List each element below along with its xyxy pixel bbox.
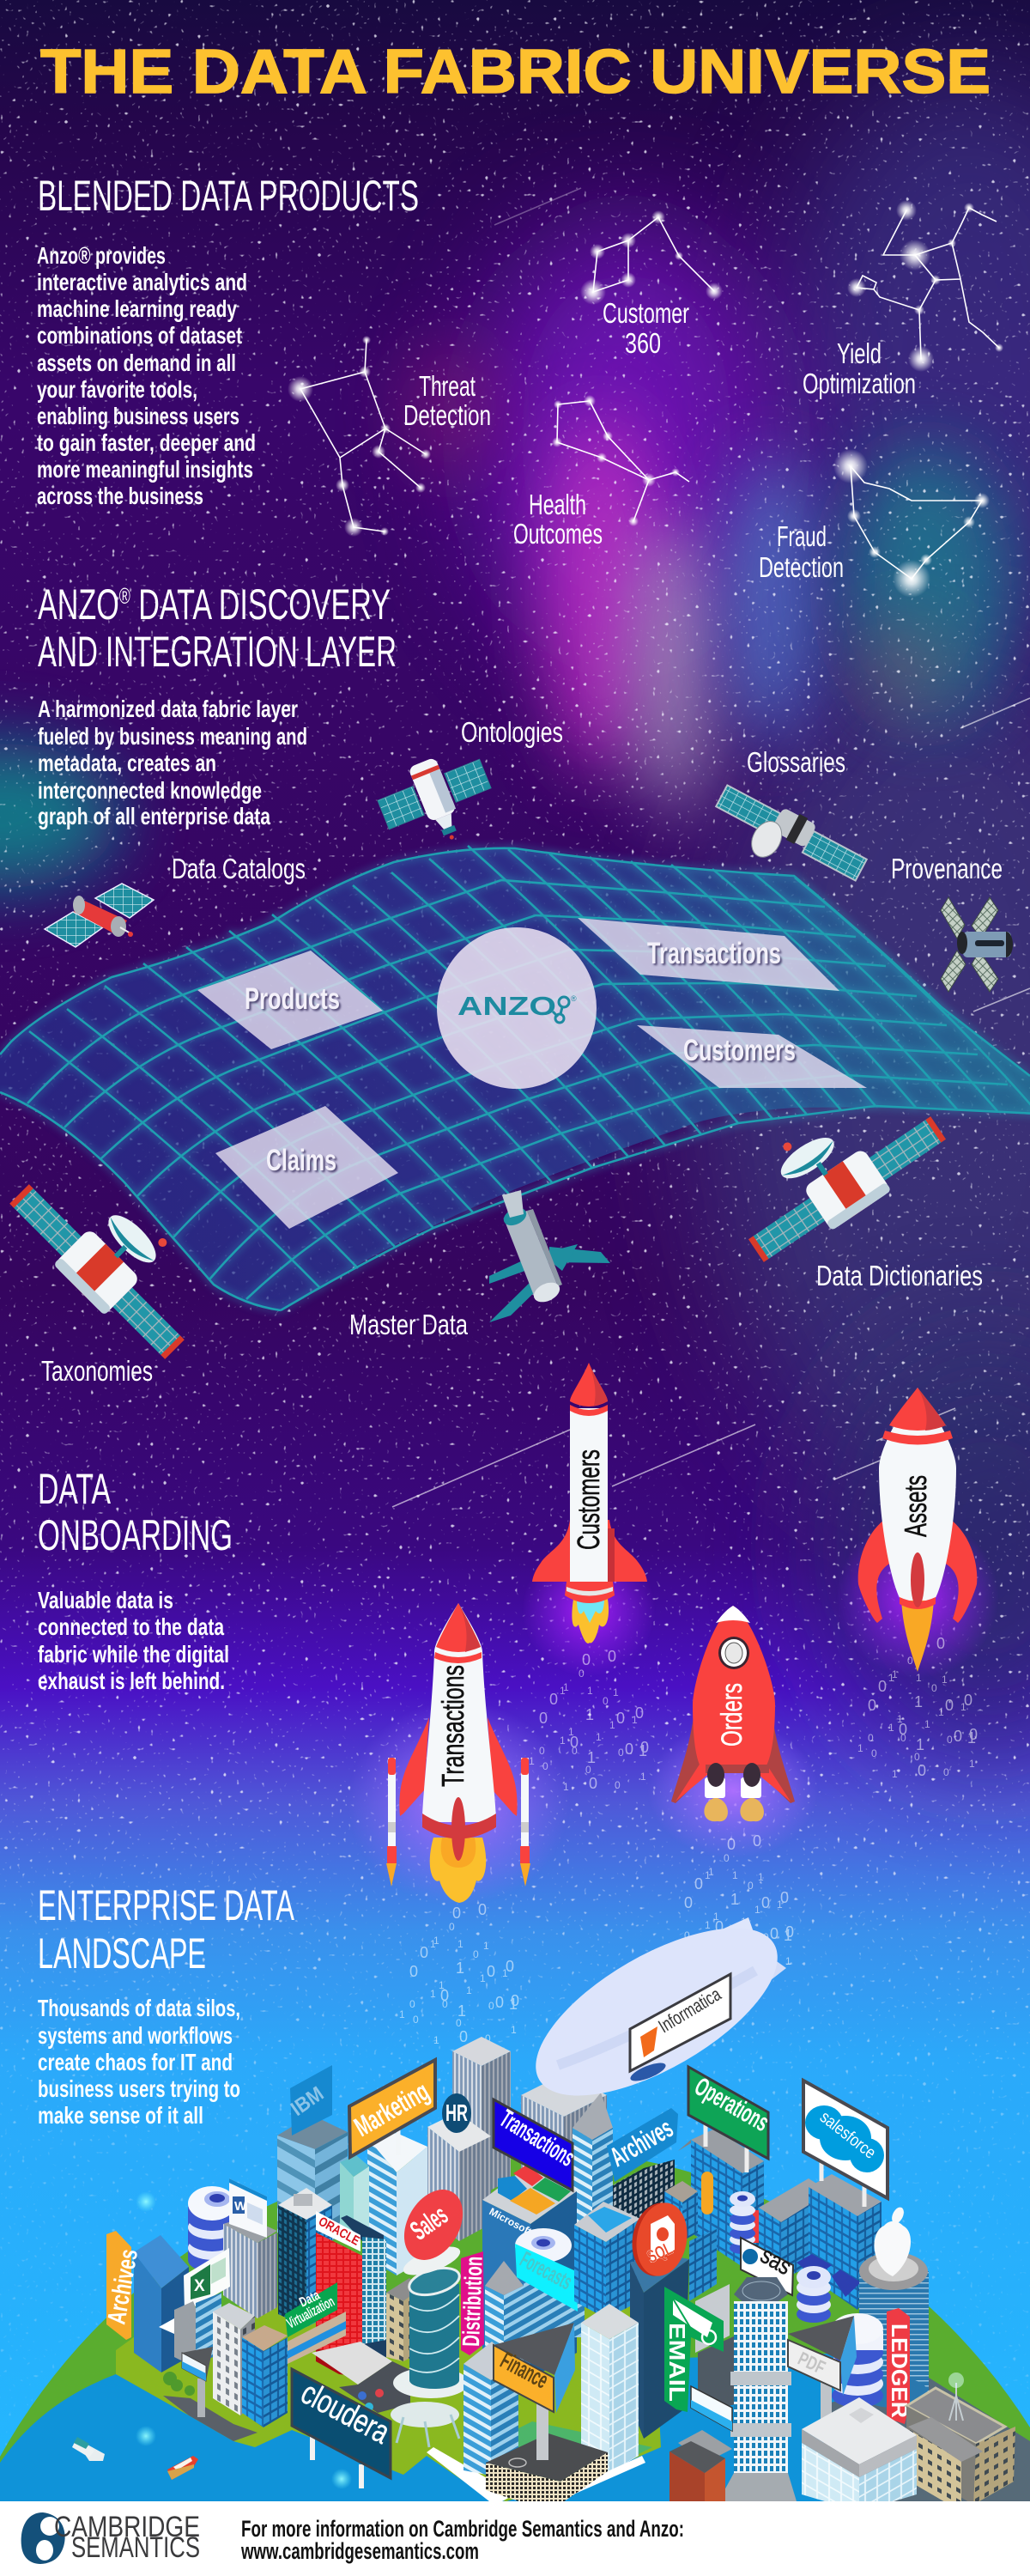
sign: sql: SQL bbox=[644, 2239, 676, 2268]
text block: integration layer: fueled by business meaning and bbox=[38, 723, 307, 750]
tower: dark glass bbox=[278, 2188, 332, 2327]
rocket label: customers: Customers bbox=[571, 1449, 606, 1550]
label: data dictionaries: Data Dictionaries bbox=[816, 1260, 983, 1291]
building: brick bbox=[670, 2430, 732, 2512]
label: data catalogs: Data Catalogs bbox=[172, 853, 306, 884]
rocket: assets bbox=[858, 1388, 977, 1672]
binary exhaust: customers: 10111011010110001110 bbox=[529, 1668, 646, 1793]
blocks: behind salesforce bbox=[759, 2174, 882, 2310]
building: pale bbox=[367, 2133, 427, 2275]
label: master data: Master Data bbox=[349, 1309, 468, 1340]
rocket: transactions bbox=[386, 1603, 530, 1903]
tower: blue peak bbox=[573, 2093, 613, 2233]
sign: sales: Sales bbox=[404, 2199, 453, 2246]
billboard: cloudera: cloudera bbox=[295, 2375, 396, 2451]
constellation: health outcomes bbox=[513, 395, 689, 550]
constellation: threat detection: Threat bbox=[419, 370, 476, 402]
binary exhaust: transactions: 0000100010100 bbox=[409, 1901, 519, 2045]
text block: enterprise data landscape: create chaos for IT and bbox=[38, 2049, 233, 2075]
label: glossaries: Glossaries bbox=[747, 746, 845, 778]
airship: informatica: Informatica bbox=[655, 1983, 725, 2037]
rocket label: orders: Orders bbox=[716, 1683, 748, 1747]
rocket glows bbox=[347, 1516, 999, 1906]
binary exhaust: assets: 0000100010100 bbox=[868, 1635, 978, 1779]
heading: enterprise data landscape: LANDSCAPE bbox=[38, 1929, 206, 1978]
binary exhaust: customers: 0000100010100 bbox=[539, 1648, 649, 1792]
constellation: fraud detection: Fraud bbox=[777, 520, 827, 552]
constellation: yield optimization: Optimization bbox=[803, 368, 916, 399]
building: microsoft: Microsoft bbox=[488, 2205, 534, 2238]
text block: data onboarding: exhaust is left behind. bbox=[38, 1668, 225, 1694]
heading: data onboarding: ONBOARDING bbox=[38, 1511, 233, 1559]
tower: teal right of oracle bbox=[341, 2215, 386, 2363]
panel: customers: Customers bbox=[683, 1034, 796, 1067]
text block: blended data products bbox=[37, 242, 256, 509]
label: taxonomies: Taxonomies bbox=[41, 1355, 153, 1387]
database: forecasts bbox=[515, 2228, 572, 2263]
constellation: health outcomes: Outcomes bbox=[513, 518, 603, 550]
skybridge bbox=[288, 2312, 346, 2364]
satellite: data dictionaries bbox=[715, 1067, 953, 1272]
heading: anzo data discovery and integration layer: ® bbox=[119, 583, 130, 609]
data fabric mesh bbox=[0, 846, 1030, 1310]
billboard: salesforce bbox=[803, 2081, 888, 2207]
sign: data virtualization bbox=[284, 2282, 337, 2337]
sign: forecasts: Forecasts bbox=[516, 2246, 577, 2294]
sign: sas: sas bbox=[756, 2241, 797, 2280]
constellation: yield optimization: Yield bbox=[837, 337, 882, 369]
building: brown front bbox=[486, 2433, 608, 2512]
tower: ibm bbox=[277, 2120, 348, 2241]
building: small right of dark tower bbox=[689, 2228, 736, 2413]
isometric city bbox=[72, 2037, 1015, 2512]
tower: round glass bbox=[391, 2241, 469, 2447]
text block: data onboarding: connected to the data bbox=[38, 1613, 224, 1640]
text block: integration layer: interconnected knowledge bbox=[38, 777, 262, 804]
text block: integration layer bbox=[38, 696, 307, 829]
sign: excel: X bbox=[194, 2277, 205, 2295]
constellation: threat detection bbox=[288, 336, 491, 537]
satellite: ontologies bbox=[371, 742, 504, 860]
tower: striped front bbox=[464, 2342, 518, 2476]
footer bbox=[0, 2501, 1030, 2576]
sign: ledger: LEDGER bbox=[887, 2324, 912, 2418]
heading: anzo data discovery and integration layer: ANZO bbox=[38, 580, 157, 629]
billboard: cloudera bbox=[292, 2369, 396, 2488]
constellation: fraud detection: Detection bbox=[759, 551, 844, 583]
text block: blended data products: your favorite tools, bbox=[37, 376, 197, 403]
text block: integration layer: graph of all enterprise data bbox=[38, 803, 270, 829]
tower: striped spire rear bbox=[485, 2261, 524, 2379]
tower: dark tall bbox=[630, 2254, 689, 2439]
text block: integration layer: A harmonized data fabric layer bbox=[38, 696, 298, 722]
building: apple cylinder bbox=[859, 2205, 929, 2408]
building: microsoft bbox=[482, 2164, 577, 2379]
text block: blended data products: across the business bbox=[37, 483, 203, 509]
constellation: fraud detection bbox=[759, 449, 990, 598]
heading: anzo data discovery and integration layer: DATA DISCOVERY bbox=[130, 580, 391, 629]
billboard: marketing bbox=[348, 2060, 435, 2157]
billboard: transactions bbox=[494, 2099, 579, 2190]
text block: data onboarding: fabric while the digital bbox=[38, 1641, 229, 1668]
tower: hr bbox=[427, 2112, 491, 2241]
tower: cyan windows bbox=[574, 2202, 640, 2318]
building: grey left bbox=[223, 2217, 277, 2318]
building: small tan bbox=[664, 2181, 698, 2241]
billboard: pdf: PDF bbox=[795, 2348, 828, 2379]
panel: claims: Claims bbox=[266, 1144, 336, 1177]
billboard: ibm bbox=[287, 2065, 332, 2136]
text block: integration layer: metadata, creates an bbox=[38, 750, 216, 776]
tower: grey tall bbox=[452, 2037, 511, 2195]
planet and ocean bbox=[0, 2148, 1030, 2501]
billboard: archives rear bbox=[604, 2108, 678, 2182]
buildings: small grey cluster bbox=[159, 2293, 221, 2370]
constellation: yield optimization bbox=[803, 200, 1003, 399]
billboard: finance bbox=[494, 2323, 575, 2460]
title: THE DATA FABRIC UNIVERSE bbox=[40, 38, 991, 106]
pole: orange bbox=[701, 2172, 713, 2215]
background aurora bbox=[0, 69, 1030, 1752]
heading: enterprise data landscape bbox=[38, 1881, 294, 1978]
tower: pale front right bbox=[802, 2397, 917, 2512]
text block: data onboarding bbox=[38, 1587, 229, 1694]
anzo logo circle: ANZO bbox=[457, 991, 556, 1021]
text block: enterprise data landscape: systems and workflows bbox=[38, 2022, 233, 2049]
rocket label: transactions: Transactions bbox=[435, 1665, 470, 1787]
sign: data virtualization: Data bbox=[297, 2288, 322, 2311]
text block: enterprise data landscape: Thousands of data silos, bbox=[38, 1995, 240, 2021]
tower: blue front left bbox=[242, 2325, 288, 2427]
footer text: For more information on Cambridge Semantics and Anzo: bbox=[241, 2516, 684, 2542]
sign: archives left bbox=[102, 2231, 143, 2340]
panel: customers bbox=[637, 1025, 867, 1088]
shooting stars bbox=[392, 188, 1030, 1507]
sign: email bbox=[664, 2287, 724, 2412]
building: beige behind round tower bbox=[386, 2278, 421, 2361]
tower: pale grid bbox=[581, 2304, 639, 2473]
billboard: marketing: Marketing bbox=[348, 2075, 434, 2142]
sign: sas bbox=[741, 2238, 797, 2295]
text block: blended data products: enabling business users bbox=[37, 403, 239, 429]
constellation: customer 360: Customer bbox=[603, 297, 689, 329]
sign: distribution: Distribution bbox=[457, 2256, 488, 2347]
tower: teal small bbox=[340, 2155, 369, 2241]
sign: forecasts bbox=[515, 2244, 578, 2312]
sign: data virtualization: Virtualization bbox=[284, 2293, 337, 2332]
rocket: customers bbox=[532, 1363, 647, 1643]
billboard: pdf bbox=[788, 2316, 857, 2430]
plaza bbox=[312, 2342, 410, 2413]
rocket label: assets: Assets bbox=[898, 1475, 933, 1537]
heading: anzo data discovery and integration layer: AND INTEGRATION LAYER bbox=[38, 628, 397, 676]
footer text: www.cambridgesemantics.com bbox=[240, 2538, 479, 2564]
text block: blended data products: Anzo® provides bbox=[37, 242, 166, 269]
tower: tall grid bbox=[718, 2277, 797, 2501]
billboard: finance: Finance bbox=[496, 2347, 553, 2394]
billboard: operations: Operations bbox=[690, 2072, 773, 2137]
constellation: threat detection: Detection bbox=[403, 399, 491, 431]
text block: blended data products: combinations of dataset bbox=[37, 322, 242, 349]
heading: anzo data discovery and integration layer bbox=[38, 580, 397, 676]
database: word bbox=[188, 2186, 236, 2272]
panel: transactions bbox=[578, 918, 839, 991]
sign: word: W bbox=[234, 2199, 247, 2214]
trees bbox=[163, 2372, 195, 2396]
sign: word bbox=[229, 2178, 267, 2238]
satellite: glossaries bbox=[705, 778, 870, 902]
database: small stack bbox=[730, 2191, 759, 2254]
building: slanted blue bbox=[134, 2235, 189, 2372]
buildings: beige right bbox=[906, 2372, 1015, 2512]
airship: informatica bbox=[511, 1895, 803, 2129]
striped block behind forecasts bbox=[524, 2267, 585, 2337]
panel: products bbox=[197, 951, 383, 1049]
logo: cambridge semantics: CAMBRIDGE bbox=[54, 2511, 200, 2543]
tower: dark archives bbox=[613, 2160, 675, 2258]
text block: data onboarding: Valuable data is bbox=[38, 1587, 173, 1613]
building: white grid bbox=[213, 2303, 255, 2415]
satellite: taxonomies bbox=[1, 1144, 225, 1368]
anzo logo circle bbox=[437, 927, 597, 1089]
text block: blended data products: interactive analytics and bbox=[37, 269, 247, 295]
billboard: operations bbox=[688, 2067, 773, 2172]
sign: sql bbox=[627, 2198, 693, 2281]
tower: operations bbox=[678, 2129, 764, 2267]
billboard: salesforce: salesforce bbox=[816, 2108, 879, 2163]
billboard: archives rear: Archives bbox=[604, 2112, 678, 2172]
pier bbox=[541, 2456, 645, 2501]
sign: small speech right bbox=[691, 2386, 732, 2431]
text block: blended data products: machine learning ready bbox=[37, 295, 237, 322]
heading: blended data products: BLENDED DATA PRODUCTS bbox=[38, 172, 419, 220]
tower: oracle bbox=[316, 2211, 362, 2377]
satellite: master data bbox=[489, 1190, 610, 1322]
binary exhaust: assets: 10111011010110001110 bbox=[857, 1655, 975, 1780]
text block: enterprise data landscape: business users trying to bbox=[38, 2075, 240, 2102]
panel: claims bbox=[215, 1106, 398, 1229]
building: light rear bbox=[521, 2084, 607, 2169]
binary exhaust: orders: 10111011010110001110 bbox=[674, 1852, 791, 1978]
database: sas stack bbox=[797, 2266, 831, 2323]
billboard: ibm: IBM bbox=[287, 2082, 328, 2121]
constellation: customer 360 bbox=[580, 210, 723, 359]
sign: archives left: Archives bbox=[102, 2247, 143, 2326]
binary exhaust: transactions: 10111011010110001110 bbox=[399, 1921, 517, 2046]
constellation: health outcomes: Health bbox=[529, 489, 586, 520]
text block: blended data products: more meaningful insights bbox=[37, 456, 253, 483]
sign: excel bbox=[184, 2248, 230, 2312]
text block: enterprise data landscape: make sense of it all bbox=[38, 2102, 203, 2129]
boats bbox=[72, 2437, 198, 2480]
heading: enterprise data landscape: ENTERPRISE DATA bbox=[38, 1881, 294, 1929]
sign: hr: HR bbox=[445, 2099, 468, 2126]
logo: cambridge semantics: SEMANTICS bbox=[71, 2531, 200, 2564]
rocket: orders bbox=[671, 1606, 795, 1821]
sign: sales bbox=[392, 2179, 475, 2270]
logo: cambridge semantics bbox=[21, 2511, 200, 2564]
sign: small speech left bbox=[182, 2347, 213, 2417]
label: ontologies: Ontologies bbox=[461, 716, 563, 748]
heading: data onboarding bbox=[38, 1465, 233, 1559]
satellite: provenance bbox=[941, 897, 1013, 992]
binary exhaust: orders: 0000100010100 bbox=[684, 1832, 794, 1977]
sign: hr bbox=[442, 2093, 471, 2133]
heading: data onboarding: DATA bbox=[38, 1465, 111, 1513]
footer text bbox=[240, 2516, 684, 2564]
satellite: data catalogs bbox=[45, 884, 154, 947]
solar roofs bbox=[797, 2254, 861, 2297]
text block: blended data products: to gain faster, deeper and bbox=[37, 429, 256, 456]
database: large stack bbox=[832, 2313, 883, 2408]
sign: distribution bbox=[457, 2251, 488, 2355]
panel: products: Products bbox=[245, 982, 340, 1016]
text block: blended data products: assets on demand in all bbox=[37, 349, 236, 376]
sign: email: EMAIL bbox=[664, 2323, 690, 2402]
text block: enterprise data landscape bbox=[38, 1995, 240, 2129]
constellation: customer 360: 360 bbox=[625, 327, 661, 359]
tower: oracle: ORACLE bbox=[316, 2215, 362, 2249]
billboard: transactions: Transactions bbox=[494, 2105, 579, 2172]
anzo logo circle: ® bbox=[571, 994, 577, 1003]
panel: transactions: Transactions bbox=[647, 937, 781, 970]
